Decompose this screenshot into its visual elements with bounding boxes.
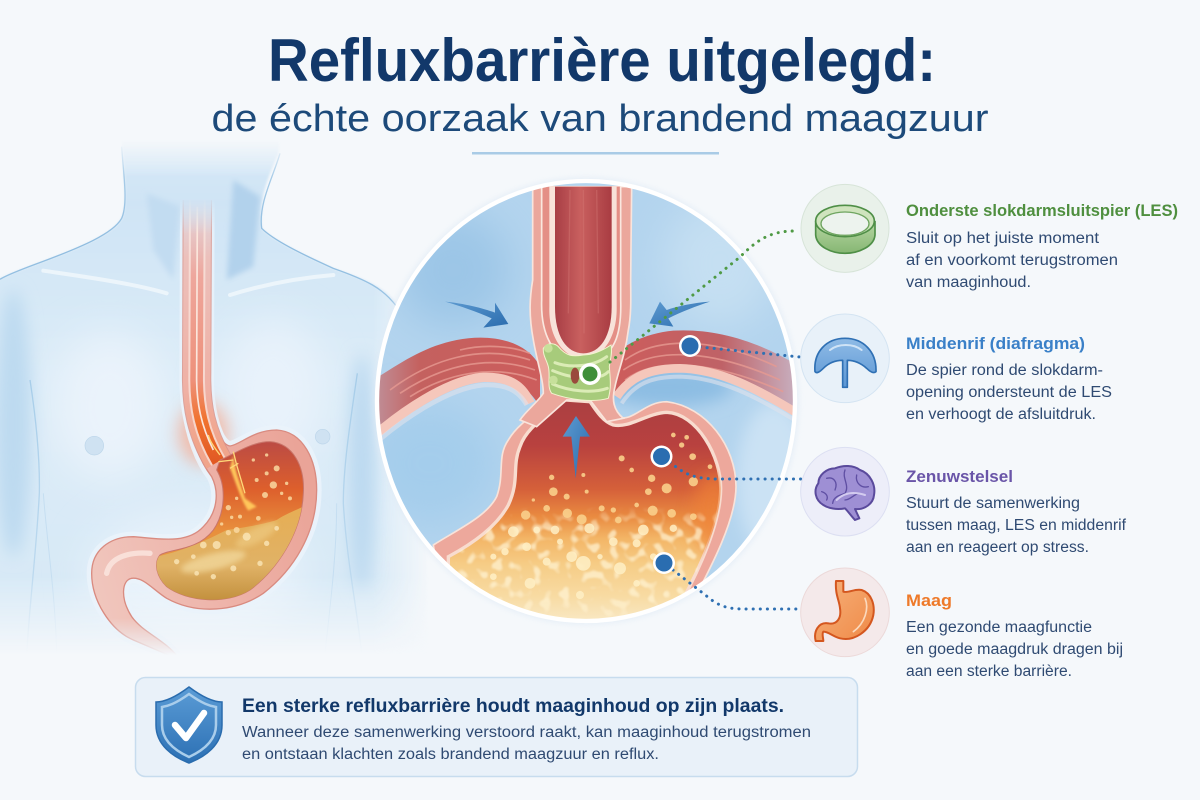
description: aan en reageert op stress.	[906, 539, 1089, 556]
sphincter (LES)	[543, 344, 612, 400]
nipples	[85, 436, 104, 455]
description	[906, 495, 1127, 556]
torso silhouette	[0, 146, 416, 642]
diaphragm muscle: right	[613, 330, 800, 423]
heading: Zenuwstelsel	[906, 467, 1013, 486]
panel: Maag	[801, 568, 1123, 680]
description: aan een sterke barrière.	[906, 663, 1072, 680]
icon: diaphragm	[801, 314, 889, 403]
icon: ring	[801, 184, 889, 272]
description: Stuurt de samenwerking	[906, 495, 1080, 512]
description: tussen maag, LES en middenrif	[906, 517, 1127, 534]
description	[906, 230, 1118, 291]
burning flare	[230, 455, 257, 511]
halo	[197, 197, 218, 462]
arrow: left pressure	[445, 302, 508, 328]
collarbones	[43, 271, 333, 295]
text: Wanneer deze samenwerking verstoord raakt, kan maaginhoud terugstromen	[242, 724, 811, 741]
heading: Een sterke refluxbarrière houdt maaginhoud op zijn plaats.	[242, 696, 784, 717]
description: van maaginhoud.	[906, 274, 1031, 291]
panel: Zenuwstelsel	[801, 447, 1127, 556]
stomach wall	[432, 400, 737, 590]
description: af en voorkomt terugstromen	[906, 252, 1118, 269]
icon: stomach	[801, 568, 889, 657]
description	[906, 619, 1123, 680]
stomach interior	[157, 442, 303, 600]
description: Sluit op het juiste moment	[906, 230, 1100, 247]
description: De spier rond de slokdarm-	[906, 362, 1103, 379]
burn glow	[178, 402, 228, 465]
arrow: right pressure	[649, 302, 710, 327]
heading: Onderste slokdarmsluitspier (LES)	[906, 201, 1178, 220]
heading: Middenrif (diafragma)	[906, 334, 1085, 353]
diaphragm muscle: left	[373, 338, 540, 445]
panel: LES	[801, 184, 1178, 291]
blue backdrop	[380, 183, 792, 579]
description: en verhoogt de afsluitdruk.	[906, 406, 1096, 423]
icon: brain	[801, 447, 889, 536]
description: Een gezonde maagfunctie	[906, 619, 1092, 636]
icon: shield	[156, 687, 222, 763]
stomach interior	[448, 400, 721, 627]
esophagus and stomach	[92, 197, 317, 660]
panel: magnified barrier view	[363, 173, 810, 640]
stomach wall	[91, 429, 318, 652]
connectors	[610, 231, 802, 609]
esophagus	[520, 187, 632, 427]
arrow: upward pressure	[563, 416, 590, 478]
text	[242, 724, 811, 763]
callout markers	[579, 335, 701, 574]
text: en ontstaan klachten zoals brandend maagzuur en reflux.	[242, 746, 659, 763]
description: en goede maagdruk dragen bij	[906, 641, 1123, 658]
callout: summary box	[136, 678, 858, 776]
description	[906, 362, 1112, 423]
heading: Maag	[906, 591, 952, 610]
panel: Middenrif	[801, 314, 1112, 423]
illustration: torso with esophagus and stomach	[0, 133, 430, 673]
title: Refluxbarrière uitgelegd:	[268, 27, 936, 94]
description: opening ondersteunt de LES	[906, 384, 1112, 401]
esophagus tube	[197, 200, 218, 462]
body contour lines	[0, 147, 397, 653]
foam bubbles	[458, 508, 718, 616]
subtitle: de échte oorzaak van brandend maagzuur	[212, 98, 989, 140]
